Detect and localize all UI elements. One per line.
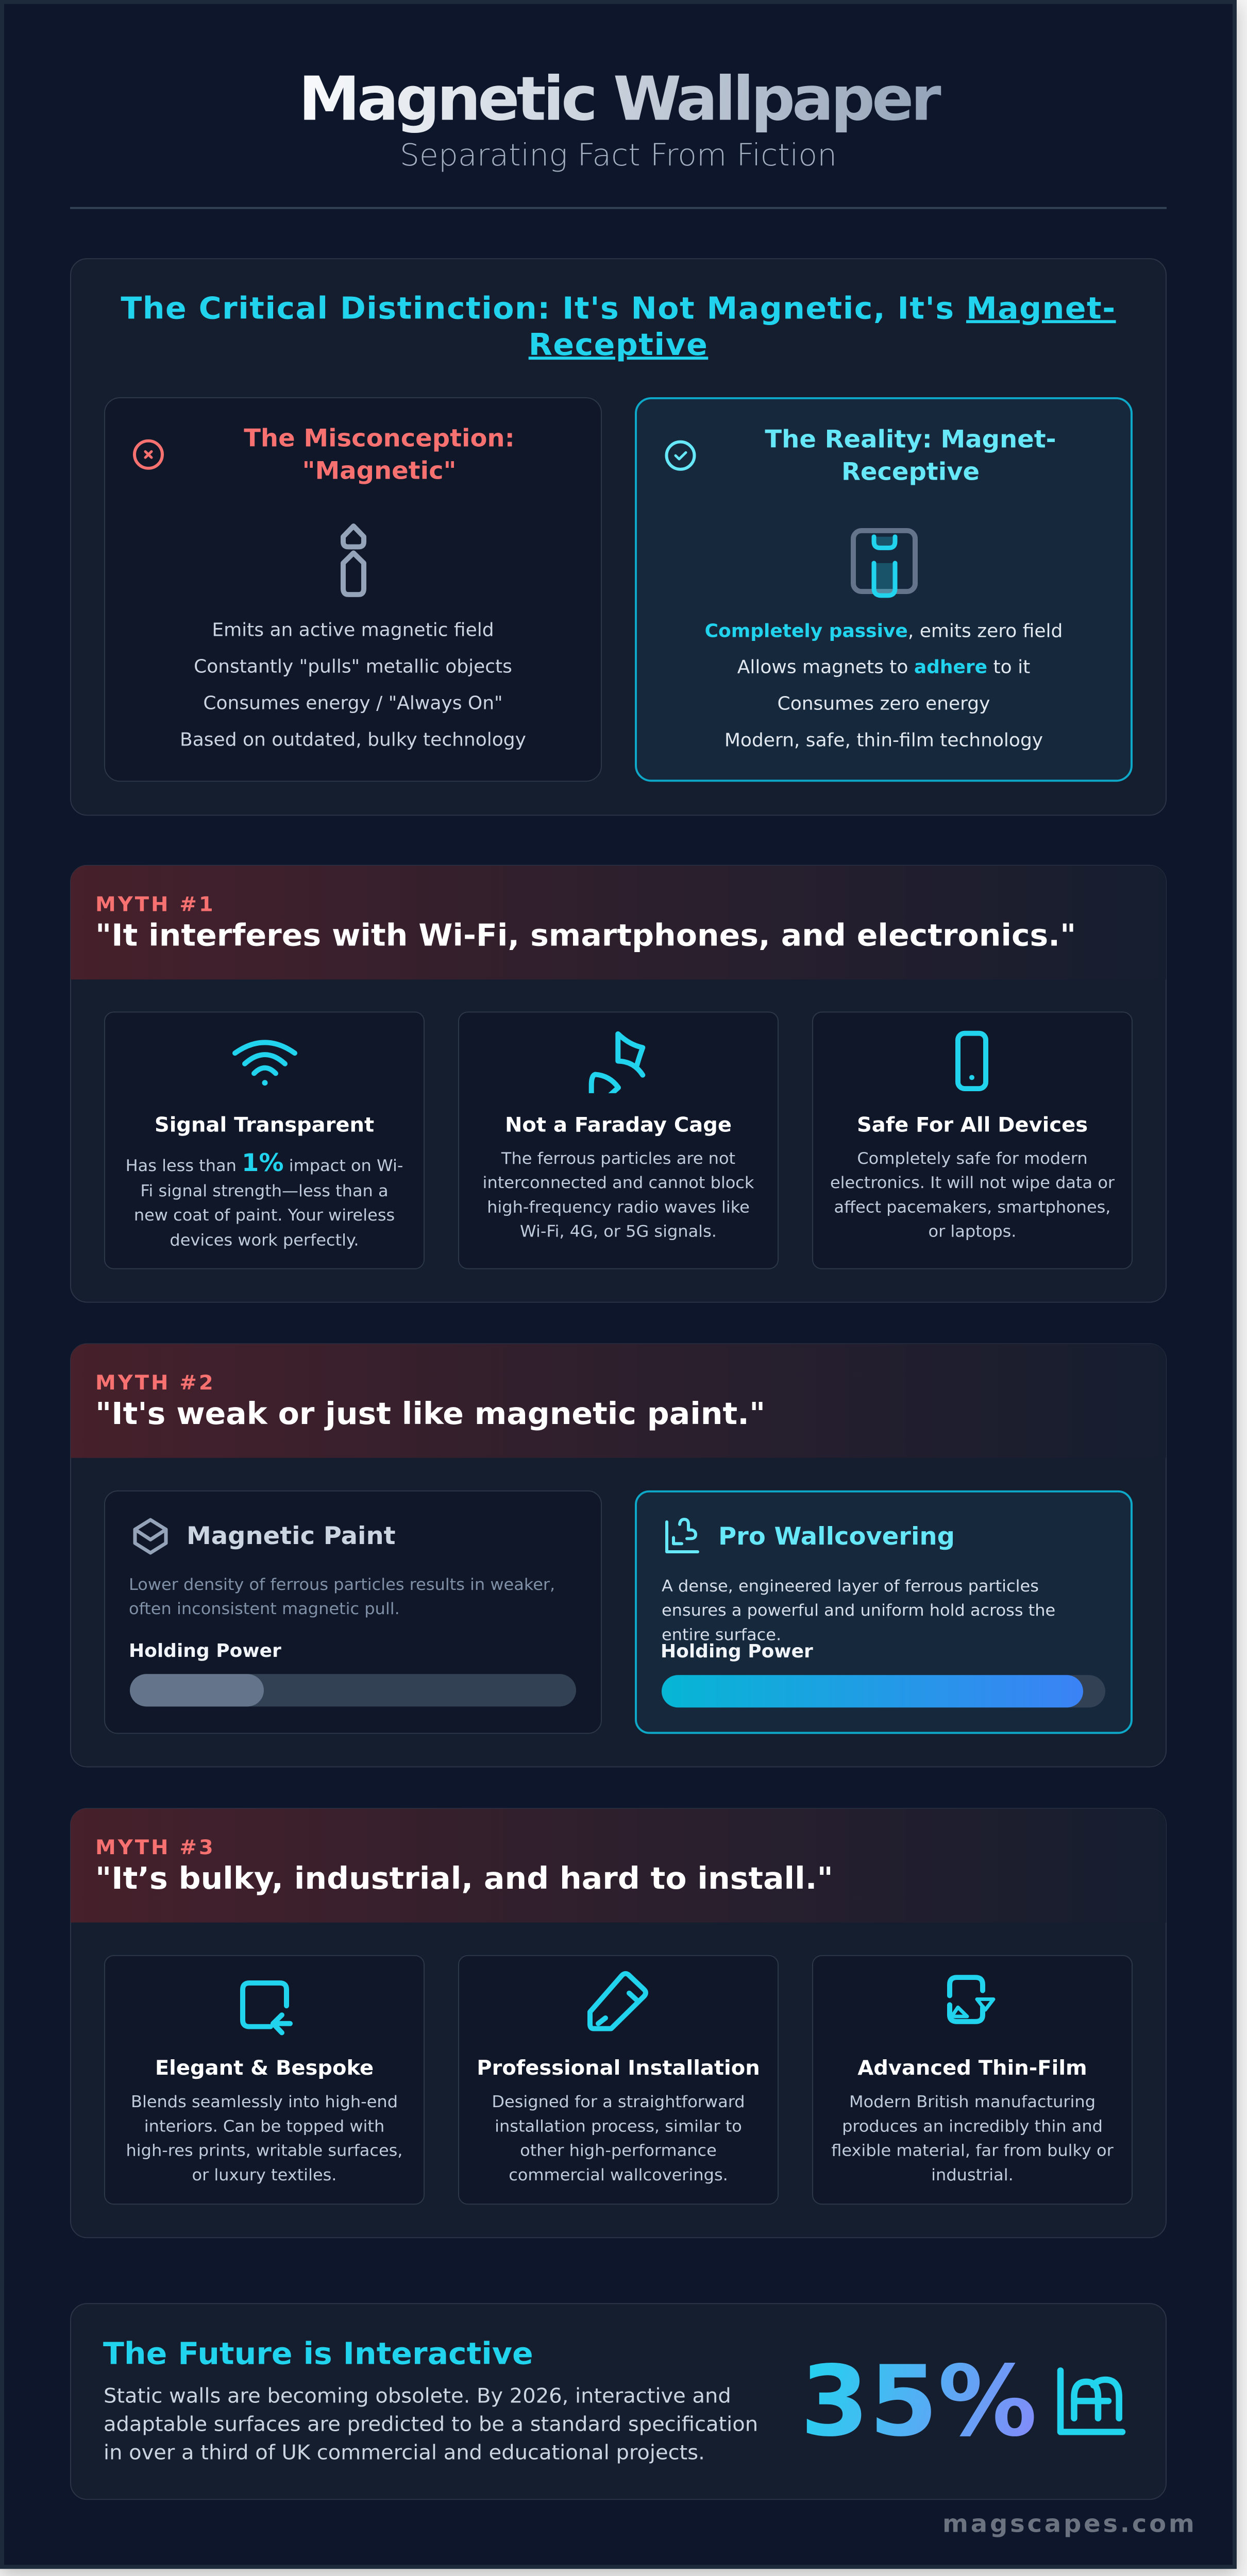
icon: panel with arrow bbox=[243, 1983, 290, 2032]
list: misconception points: Consumes energy / "Always On" bbox=[203, 693, 503, 714]
list: reality points: Consumes zero energy bbox=[778, 693, 990, 714]
icon: x circle bbox=[134, 441, 162, 468]
card heading: The Reality: Magnet- bbox=[765, 426, 1056, 453]
panel: critical distinction bbox=[71, 259, 1166, 815]
card body: high-res prints, writable surfaces, bbox=[126, 2142, 402, 2160]
card: advanced thin-film bbox=[813, 1956, 1132, 2204]
card body: commercial wallcoverings. bbox=[509, 2166, 728, 2184]
card: signal transparent bbox=[105, 1012, 424, 1269]
myth label: MYTH #2 bbox=[95, 1371, 215, 1395]
panel body: in over a third of UK commercial and educational projects. bbox=[104, 2441, 705, 2464]
card: not a faraday cage bbox=[459, 1012, 778, 1269]
card body: industrial. bbox=[931, 2166, 1014, 2184]
card: the misconception bbox=[105, 398, 601, 781]
panel: myth 3 bbox=[71, 1808, 1166, 2238]
card body: devices work perfectly. bbox=[170, 1231, 359, 1249]
list: misconception points: Based on outdated, bulky technology bbox=[180, 730, 526, 750]
icon: hexagon box bbox=[135, 1520, 166, 1553]
card body: flexible material, far from bulky or bbox=[831, 2142, 1114, 2160]
card body: interiors. Can be topped with bbox=[144, 2117, 384, 2136]
card heading: The Misconception: bbox=[244, 425, 515, 452]
icon: growth chart bbox=[1060, 2370, 1122, 2432]
card body: affect pacemakers, smartphones, bbox=[834, 1198, 1110, 1216]
card title: Pro Wallcovering bbox=[718, 1523, 955, 1551]
icon: wifi bbox=[235, 1042, 295, 1086]
holding power bar: 95% bbox=[662, 1675, 1105, 1707]
panel heading: Receptive bbox=[529, 328, 708, 363]
myth statement: "It's weak or just like magnetic paint." bbox=[95, 1396, 765, 1432]
card: safe for all devices bbox=[813, 1012, 1132, 1269]
list: reality points: Completely passive, emits zero field bbox=[705, 621, 1063, 642]
card body: interconnected and cannot block bbox=[483, 1174, 754, 1192]
card: the reality bbox=[636, 398, 1132, 781]
myth statement: "It’s bulky, industrial, and hard to install." bbox=[95, 1861, 833, 1896]
card body: electronics. It will not wipe data or bbox=[830, 1174, 1115, 1192]
list: reality points bbox=[705, 621, 1063, 751]
card title: Magnetic Paint bbox=[187, 1522, 396, 1550]
card body: Designed for a straightforward bbox=[492, 2093, 745, 2111]
icon: wallcovering layers bbox=[667, 1519, 698, 1552]
card body: other high-performance bbox=[520, 2142, 717, 2160]
icon: receptive surface with magnet bbox=[853, 531, 915, 596]
card body: produces an incredibly thin and bbox=[842, 2117, 1103, 2136]
card body: ensures a powerful and uniform hold across the bbox=[662, 1601, 1055, 1620]
myth header band bbox=[71, 866, 1166, 979]
card body: installation process, similar to bbox=[495, 2117, 742, 2136]
card body: entire surface. bbox=[662, 1626, 781, 1644]
holding power bar: 30% bbox=[130, 1674, 576, 1706]
card title: Professional Installation bbox=[477, 2056, 760, 2080]
panel body: Static walls are becoming obsolete. By 2026, interactive and bbox=[104, 2384, 731, 2408]
card body: Lower density of ferrous particles results in weaker, bbox=[129, 1575, 555, 1594]
myth label: MYTH #1 bbox=[95, 893, 215, 916]
card body: A dense, engineered layer of ferrous particles bbox=[662, 1577, 1039, 1596]
card title: Safe For All Devices bbox=[857, 1113, 1088, 1137]
card body: or laptops. bbox=[929, 1223, 1016, 1241]
panel: the future is interactive bbox=[71, 2303, 1166, 2499]
card title: Elegant & Bespoke bbox=[155, 2056, 374, 2080]
card body: Completely safe for modern bbox=[857, 1149, 1088, 1168]
myth label: MYTH #3 bbox=[95, 1836, 215, 1859]
icon: active magnet bbox=[343, 526, 364, 595]
card body: Has less than 1% impact on Wi- bbox=[126, 1149, 403, 1177]
panel heading: The Critical Distinction: It's Not Magnetic, It's Magnet- bbox=[121, 291, 1116, 326]
icon: signal fragments bbox=[592, 1034, 643, 1098]
card body: often inconsistent magnetic pull. bbox=[129, 1600, 400, 1618]
myth header band bbox=[71, 1808, 1166, 1923]
statistic: 35%: 35% bbox=[800, 2345, 1037, 2458]
list: misconception points bbox=[180, 620, 526, 750]
panel heading: The Future is Interactive bbox=[103, 2336, 533, 2371]
card heading: Receptive bbox=[841, 458, 980, 486]
card title: Signal Transparent bbox=[155, 1113, 374, 1137]
list: reality points: Modern, safe, thin-film technology bbox=[724, 730, 1043, 751]
icon: phone bbox=[958, 1033, 986, 1089]
card body: Wi-Fi, 4G, or 5G signals. bbox=[520, 1223, 717, 1241]
card: professional installation bbox=[459, 1956, 778, 2204]
icon: check circle bbox=[667, 442, 695, 469]
card: pro wallcovering bbox=[636, 1492, 1132, 1733]
panel body: adaptable surfaces are predicted to be a standard specification bbox=[104, 2413, 758, 2436]
card body: new coat of paint. Your wireless bbox=[134, 1206, 395, 1225]
card body: Modern British manufacturing bbox=[849, 2093, 1096, 2111]
card body: Blends seamlessly into high-end bbox=[131, 2093, 398, 2111]
myth statement: "It interferes with Wi-Fi, smartphones, and electronics." bbox=[95, 918, 1076, 953]
card: magnetic paint bbox=[105, 1491, 601, 1734]
list: reality points: Allows magnets to adhere to it bbox=[737, 657, 1030, 678]
list: misconception points: Emits an active magnetic field bbox=[212, 620, 494, 641]
card title: Advanced Thin-Film bbox=[857, 2056, 1087, 2080]
card body: The ferrous particles are not bbox=[501, 1149, 735, 1168]
card body: high-frequency radio waves like bbox=[487, 1198, 750, 1216]
card body: Fi signal strength—less than a bbox=[140, 1182, 389, 1200]
icon: thin film bbox=[950, 1977, 993, 2022]
myth header band bbox=[71, 1344, 1166, 1458]
card title: Not a Faraday Cage bbox=[505, 1113, 732, 1137]
title: Magnetic Wallpaper bbox=[298, 63, 941, 134]
bar label: Holding Power bbox=[661, 1641, 813, 1662]
panel: myth 1 bbox=[71, 866, 1166, 1302]
list: misconception points: Constantly "pulls" metallic objects bbox=[194, 656, 512, 677]
card body: or luxury textiles. bbox=[192, 2166, 336, 2184]
subtitle: Separating Fact From Fiction bbox=[400, 138, 837, 173]
panel: myth 2 bbox=[71, 1344, 1166, 1767]
card: elegant and bespoke bbox=[105, 1956, 424, 2204]
bar label: Holding Power bbox=[129, 1640, 281, 1662]
header bbox=[70, 63, 1167, 209]
footer brand: magscapes.com bbox=[942, 2510, 1197, 2538]
card heading: "Magnetic" bbox=[302, 457, 457, 485]
icon: pencil bbox=[590, 1974, 646, 2029]
